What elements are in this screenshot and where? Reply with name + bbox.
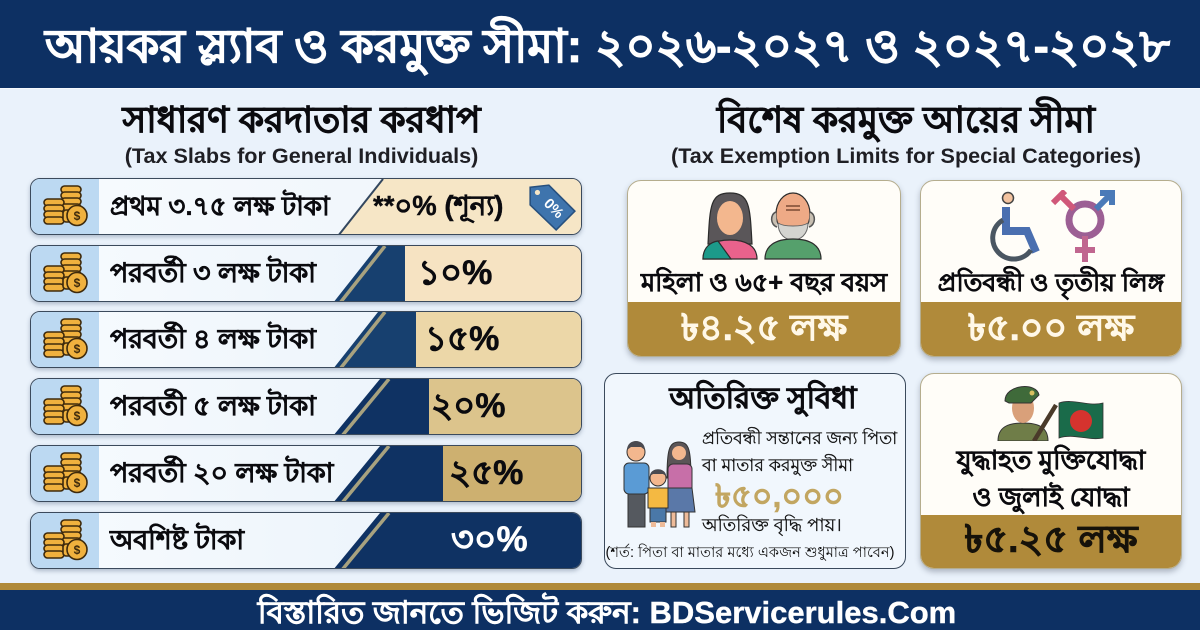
- heading: general taxpayers: (Tax Slabs for General Individuals): [125, 143, 478, 168]
- slab row 3: [30, 311, 582, 368]
- slab row 2: [30, 245, 582, 302]
- card label: ও জুলাই যোদ্ধা: [973, 482, 1129, 512]
- benefit text: [702, 426, 898, 476]
- card: freedom fighters: [920, 373, 1182, 569]
- slab label: পরবর্তী ২০ লক্ষ টাকা: [110, 458, 333, 488]
- card label: [956, 444, 1146, 514]
- heading: special categories: [671, 96, 1141, 168]
- card amount: [921, 515, 1181, 568]
- benefit text: বা মাতার করমুক্ত সীমা: [702, 455, 853, 475]
- condition note: (শর্ত: পিতা বা মাতার মধ্যে একজন শুধুমাত্র পাবেন): [606, 545, 894, 561]
- benefit amount: ৳৫০,০০০: [715, 478, 844, 514]
- benefit text continued: অতিরিক্ত বৃদ্ধি পায়।: [702, 515, 842, 535]
- slab rate: **০% (শূন্য): [373, 190, 503, 221]
- slab row 6: [30, 512, 582, 569]
- slab row 5: [30, 445, 582, 502]
- icon: woman and old man: [702, 192, 822, 260]
- icon: coins: [31, 446, 99, 501]
- gold rule: [0, 583, 1200, 590]
- benefit text: প্রতিবন্ধী সন্তানের জন্য পিতা: [702, 428, 897, 448]
- slab rate: ৩০%: [451, 520, 528, 559]
- icon: coins: [31, 246, 99, 301]
- slab rate: ১৫%: [425, 320, 499, 358]
- icon: coins: [31, 379, 99, 434]
- heading: special categories: বিশেষ করমুক্ত আয়ের সীমা: [717, 99, 1095, 140]
- footer text: বিস্তারিত জানতে ভিজিট করুন: BDServicerules.Com: [258, 595, 956, 630]
- card amount: [628, 302, 900, 356]
- card amount: ৳৫.০০ লক্ষ: [968, 307, 1134, 348]
- title: আয়কর স্ল্যাব ও করমুক্ত সীমা: ২০২৬-২০২৭ ও ২০২৭-২০২৮: [45, 20, 1170, 72]
- panel: additional benefit: [604, 373, 906, 569]
- icon: wheelchair and gender symbol: [990, 190, 1115, 262]
- card label: যুদ্ধাহত মুক্তিযোদ্ধা: [957, 445, 1145, 475]
- panel heading: অতিরিক্ত সুবিধা: [669, 382, 857, 415]
- heading: general taxpayers: সাধারণ করদাতার করধাপ: [122, 99, 481, 140]
- slab label: অবশিষ্ট টাকা: [110, 525, 244, 555]
- icon: coins: [31, 179, 99, 234]
- icon: percent tag: 0%: [540, 196, 566, 222]
- card amount: ৳৪.২৫ লক্ষ: [681, 307, 847, 348]
- heading: general taxpayers: [121, 99, 482, 168]
- card: women and seniors: [627, 180, 901, 357]
- card label: মহিলা ও ৬৫+ বছর বয়স: [641, 269, 887, 297]
- icon: percent tag: [529, 184, 576, 231]
- footer band: [0, 590, 1200, 630]
- card amount: [921, 302, 1181, 356]
- slab rate: ২৫%: [449, 454, 523, 492]
- header band: [0, 0, 1200, 89]
- slab row 1: [30, 178, 582, 235]
- card label: প্রতিবন্ধী ও তৃতীয় লিঙ্গ: [938, 269, 1164, 297]
- slab label: পরবর্তী ৫ লক্ষ টাকা: [110, 391, 316, 421]
- slab label: পরবর্তী ৩ লক্ষ টাকা: [110, 258, 316, 288]
- icon: family: [624, 441, 696, 528]
- slab rate: ১০%: [418, 254, 492, 292]
- card: disabled and third gender: [920, 180, 1182, 357]
- slab row 4: [30, 378, 582, 435]
- icon: coins: [31, 513, 99, 568]
- slab label: প্রথম ৩.৭৫ লক্ষ টাকা: [110, 191, 330, 221]
- slab rate: ২০%: [431, 387, 505, 425]
- icon: soldier and flag: [998, 386, 1104, 441]
- slab label: পরবর্তী ৪ লক্ষ টাকা: [110, 324, 316, 354]
- icon: coins: [31, 312, 99, 367]
- card amount: ৳৫.২৫ লক্ষ: [964, 519, 1138, 561]
- heading: special categories: (Tax Exemption Limits for Special Categories): [671, 143, 1141, 168]
